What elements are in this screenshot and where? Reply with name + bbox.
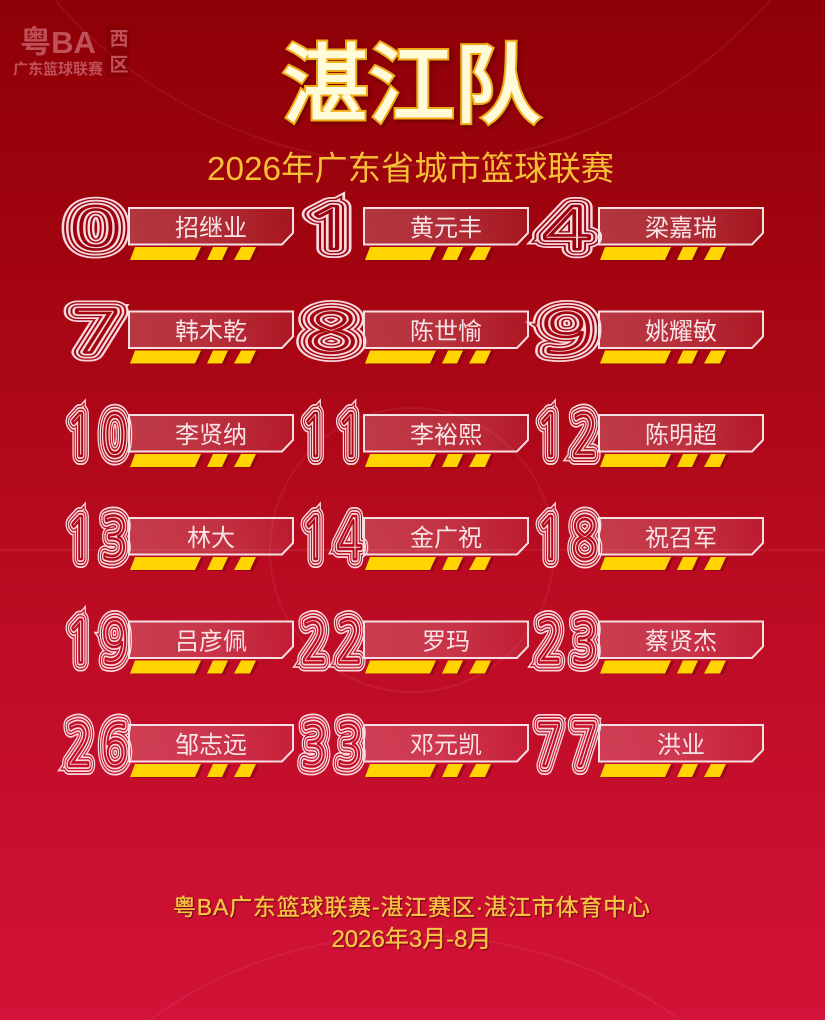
jersey number 22: 22 — [301, 614, 372, 672]
name banner — [364, 725, 528, 762]
player card: 22 罗玛 — [301, 614, 528, 674]
logo: 粤BA 西区: 粤BA — [20, 25, 96, 60]
jersey number 9: 9 — [541, 303, 593, 361]
player name: 吕彦佩 — [175, 628, 247, 656]
title: 湛江队 — [282, 38, 540, 134]
player name: 李贤纳 — [175, 422, 247, 449]
name banner — [129, 312, 293, 348]
jersey number 77: 77 — [536, 717, 607, 775]
jersey number 10: 10 — [66, 407, 137, 465]
player card: 14 金广祝 — [301, 510, 528, 570]
jersey number 8: 8 — [305, 303, 357, 361]
jersey number 12: 12 — [536, 407, 607, 465]
jersey number 12: 12 — [536, 407, 607, 465]
jersey number 23: 23 — [536, 614, 607, 672]
jersey number 13: 13 — [66, 510, 137, 568]
footer text — [173, 894, 650, 953]
jersey number 19: 19 — [66, 614, 137, 672]
yellow stripes — [365, 454, 491, 467]
player name: 韩木乾 — [175, 318, 247, 346]
jersey number 18: 18 — [536, 510, 607, 568]
jersey number 13: 13 — [66, 510, 137, 568]
jersey number 33: 33 — [301, 717, 372, 775]
jersey number 26: 26 — [66, 717, 137, 775]
jersey number 33: 33 — [301, 717, 372, 775]
jersey number 11: 11 — [301, 407, 372, 465]
jersey number 14: 14 — [301, 510, 372, 568]
yellow stripes — [600, 350, 726, 364]
jersey number 13: 13 — [66, 510, 137, 568]
jersey number 8: 8 — [305, 303, 357, 361]
jersey number 12: 12 — [536, 407, 607, 465]
jersey number 1: 1 — [303, 200, 359, 258]
jersey number 23: 23 — [536, 614, 607, 672]
subtitle: 2026年广东省城市篮球联赛 — [207, 151, 614, 188]
player name: 邹志远 — [175, 732, 247, 759]
jersey number 11: 11 — [301, 407, 372, 465]
jersey number 10: 10 — [66, 407, 137, 465]
jersey number 22: 22 — [301, 614, 372, 672]
jersey number 33: 33 — [301, 717, 372, 775]
name banner — [364, 415, 528, 452]
jersey number 9: 9 — [541, 303, 593, 361]
jersey number 9: 9 — [541, 303, 593, 361]
player card: 26 邹志远 — [66, 717, 293, 777]
player card: 4 梁嘉瑞 — [542, 200, 763, 260]
yellow stripes — [130, 247, 256, 260]
player name: 陈明超 — [645, 422, 717, 449]
jersey number 18: 18 — [536, 510, 607, 568]
jersey number 19: 19 — [66, 614, 137, 672]
jersey number 0: 0 — [70, 200, 121, 258]
jersey number 7: 7 — [71, 304, 122, 361]
name banner — [364, 518, 528, 554]
jersey number 7: 7 — [71, 304, 122, 361]
player card: 0 招继业 — [70, 200, 293, 260]
jersey number 18: 18 — [536, 510, 607, 568]
jersey number 26: 26 — [66, 717, 137, 775]
jersey number 26: 26 — [66, 717, 137, 775]
jersey number 7: 7 — [71, 304, 122, 361]
jersey number 9: 9 — [541, 303, 593, 361]
name banner — [599, 208, 763, 244]
player name: 梁嘉瑞 — [645, 215, 717, 242]
jersey number 8: 8 — [305, 303, 357, 361]
jersey number 18: 18 — [536, 510, 607, 568]
name banner — [364, 622, 528, 658]
jersey number 23: 23 — [536, 614, 607, 672]
jersey number 19: 19 — [66, 614, 137, 672]
jersey number 26: 26 — [66, 717, 137, 775]
name banner — [129, 622, 293, 658]
footer text: 粤BA广东篮球联赛-湛江赛区·湛江市体育中心 — [173, 894, 650, 920]
jersey number 9: 9 — [541, 303, 593, 361]
name banner — [599, 518, 763, 554]
name banner — [129, 415, 293, 452]
jersey number 33: 33 — [301, 717, 372, 775]
player name: 邓元凯 — [410, 732, 482, 759]
yellow stripes — [600, 454, 726, 467]
footer text: 2026年3月-8月 — [331, 926, 492, 953]
jersey number 13: 13 — [66, 510, 137, 568]
player name: 祝召军 — [645, 525, 717, 552]
jersey number 14: 14 — [301, 510, 372, 568]
jersey number 8: 8 — [305, 303, 357, 361]
name banner — [599, 312, 763, 348]
yellow stripes — [365, 660, 491, 674]
player card: 11 李裕熙 — [301, 407, 528, 467]
yellow stripes — [130, 557, 256, 570]
player card: 77 洪业 — [536, 717, 763, 777]
player card: 10 李贤纳 — [66, 407, 293, 467]
jersey number 33: 33 — [301, 717, 372, 775]
logo: 粤BA 西区 — [13, 25, 130, 78]
jersey number 18: 18 — [536, 510, 607, 568]
jersey number 14: 14 — [301, 510, 372, 568]
jersey number 22: 22 — [301, 614, 372, 672]
player card: 7 韩木乾 — [71, 304, 293, 364]
jersey number 14: 14 — [301, 510, 372, 568]
jersey number 4: 4 — [542, 200, 592, 258]
jersey number 77: 77 — [536, 717, 607, 775]
jersey number 1: 1 — [303, 200, 359, 258]
jersey number 26: 26 — [66, 717, 137, 775]
name banner — [129, 518, 293, 554]
player name: 招继业 — [175, 215, 247, 242]
jersey number 0: 0 — [70, 200, 121, 258]
jersey number 0: 0 — [70, 200, 121, 258]
jersey number 23: 23 — [536, 614, 607, 672]
name banner — [129, 725, 293, 762]
jersey number 4: 4 — [542, 200, 592, 258]
jersey number 1: 1 — [303, 200, 359, 258]
jersey number 19: 19 — [66, 614, 137, 672]
yellow stripes — [130, 454, 256, 467]
jersey number 8: 8 — [305, 303, 357, 361]
jersey number 12: 12 — [536, 407, 607, 465]
jersey number 14: 14 — [301, 510, 372, 568]
yellow stripes — [365, 764, 491, 777]
yellow stripes — [130, 660, 256, 674]
jersey number 22: 22 — [301, 614, 372, 672]
yellow stripes — [600, 764, 726, 777]
player name: 洪业 — [657, 732, 705, 759]
yellow stripes — [600, 247, 726, 260]
player card: 23 蔡贤杰 — [536, 614, 763, 674]
title: 湛江队 — [282, 38, 540, 134]
jersey number 8: 8 — [305, 303, 357, 361]
jersey number 11: 11 — [301, 407, 372, 465]
jersey number 7: 7 — [71, 304, 122, 361]
jersey number 10: 10 — [66, 407, 137, 465]
jersey number 26: 26 — [66, 717, 137, 775]
jersey number 11: 11 — [301, 407, 372, 465]
player name: 黄元丰 — [410, 215, 482, 242]
player card: 9 姚耀敏 — [541, 303, 763, 364]
player card: 18 祝召军 — [536, 510, 763, 570]
jersey number 77: 77 — [536, 717, 607, 775]
yellow stripes — [600, 660, 726, 674]
jersey number 10: 10 — [66, 407, 137, 465]
player name: 陈世愉 — [410, 318, 482, 346]
player name: 蔡贤杰 — [645, 628, 717, 656]
jersey number 33: 33 — [301, 717, 372, 775]
yellow stripes — [600, 557, 726, 570]
jersey number 22: 22 — [301, 614, 372, 672]
player name: 金广祝 — [410, 525, 482, 552]
name banner — [129, 208, 293, 244]
jersey number 0: 0 — [70, 200, 121, 258]
player card: 12 陈明超 — [536, 407, 763, 467]
jersey number 9: 9 — [541, 303, 593, 361]
jersey number 12: 12 — [536, 407, 607, 465]
jersey number 0: 0 — [70, 200, 121, 258]
player name: 李裕熙 — [410, 422, 482, 449]
player card: 13 林大 — [66, 510, 293, 570]
jersey number 7: 7 — [71, 304, 122, 361]
player name: 林大 — [187, 525, 235, 552]
jersey number 77: 77 — [536, 717, 607, 775]
jersey number 11: 11 — [301, 407, 372, 465]
logo: 粤BA 西区: 西 — [109, 29, 129, 50]
jersey number 77: 77 — [536, 717, 607, 775]
player card: 1 黄元丰 — [303, 200, 528, 260]
jersey number 4: 4 — [542, 200, 592, 258]
logo: 粤BA 西区: 区 — [109, 55, 129, 76]
jersey number 10: 10 — [66, 407, 137, 465]
name banner — [364, 208, 528, 244]
jersey number 13: 13 — [66, 510, 137, 568]
name banner — [364, 312, 528, 348]
jersey number 19: 19 — [66, 614, 137, 672]
jersey number 1: 1 — [303, 200, 359, 258]
name banner — [599, 415, 763, 452]
yellow stripes — [130, 350, 256, 364]
jersey number 10: 10 — [66, 407, 137, 465]
jersey number 7: 7 — [71, 304, 122, 361]
jersey number 4: 4 — [542, 200, 592, 258]
yellow stripes — [365, 350, 491, 364]
name banner — [599, 725, 763, 762]
player card: 33 邓元凯 — [301, 717, 528, 777]
name banner — [599, 622, 763, 658]
jersey number 13: 13 — [66, 510, 137, 568]
yellow stripes — [365, 247, 491, 260]
jersey number 4: 4 — [542, 200, 592, 258]
yellow stripes — [365, 557, 491, 570]
jersey number 12: 12 — [536, 407, 607, 465]
jersey number 19: 19 — [66, 614, 137, 672]
jersey number 14: 14 — [301, 510, 372, 568]
jersey number 23: 23 — [536, 614, 607, 672]
player name: 姚耀敏 — [645, 318, 717, 346]
jersey number 1: 1 — [303, 200, 359, 258]
player card: 8 陈世愉 — [305, 303, 528, 364]
player card: 19 吕彦佩 — [66, 614, 293, 674]
player name: 罗玛 — [422, 628, 470, 656]
jersey number 22: 22 — [301, 614, 372, 672]
jersey number 0: 0 — [70, 200, 121, 258]
jersey number 4: 4 — [542, 200, 592, 258]
logo: 粤BA 西区: 广东篮球联赛 — [13, 60, 103, 78]
jersey number 1: 1 — [303, 200, 359, 258]
jersey number 11: 11 — [301, 407, 372, 465]
jersey number 77: 77 — [536, 717, 607, 775]
jersey number 18: 18 — [536, 510, 607, 568]
yellow stripes — [130, 764, 256, 777]
jersey number 23: 23 — [536, 614, 607, 672]
